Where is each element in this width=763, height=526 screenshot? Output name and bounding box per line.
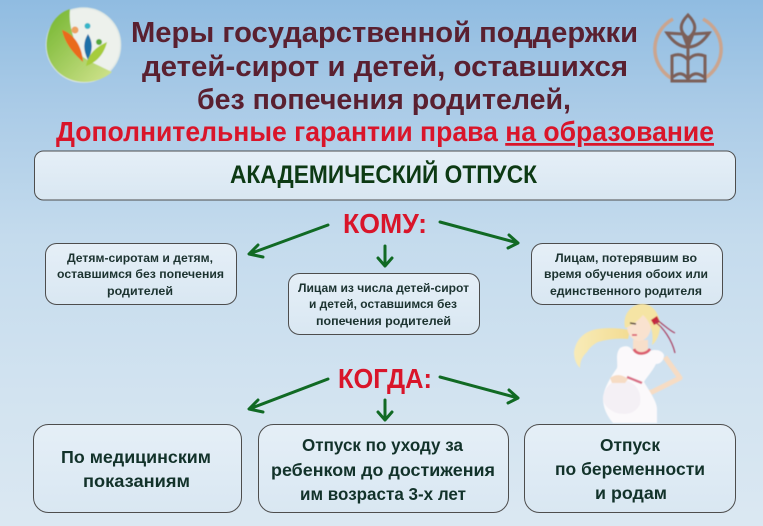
panel: childcare leave: Отпуск по уходу за: [302, 435, 463, 455]
arrow: to whom centre: [378, 246, 392, 266]
title: Дополнительные гарантии права на образование: [56, 116, 714, 147]
panel: persons who lost parents: единственного родителя: [550, 284, 702, 298]
heading: to whom: КОМУ:: [343, 208, 427, 239]
panel: pregnancy and childbirth leave: [524, 424, 736, 512]
panel: persons from among orphans: [288, 274, 480, 334]
icon: right logo with book and sprout: [655, 15, 721, 81]
panel: persons from among orphans: и детей, оставшимся без: [309, 297, 457, 311]
panel: medical grounds: По медицинским: [61, 447, 211, 467]
arrow: when centre: [378, 400, 392, 420]
panel: academic leave heading: [34, 151, 736, 200]
panel: childcare leave: [258, 424, 508, 512]
icon: left logo with leaves and figures: [46, 8, 120, 82]
panel: persons who lost parents: Лицам, потерявшим во: [555, 251, 697, 265]
panel: pregnancy and childbirth leave: и родам: [595, 483, 667, 503]
panel: medical grounds: [34, 424, 242, 512]
panel: pregnancy and childbirth leave: по беременности: [555, 459, 705, 479]
panel: orphans: оставшимся без попечения: [57, 267, 224, 281]
title: Меры государственной поддержки: [131, 17, 638, 49]
title: без попечения родителей,: [197, 84, 571, 116]
icon: pregnant woman illustration: [574, 304, 680, 423]
arrow: when left: [249, 379, 328, 412]
title: детей-сирот и детей, оставшихся: [142, 51, 628, 83]
heading: when: КОГДА:: [338, 363, 432, 394]
title: [56, 17, 714, 147]
arrow: to whom right: [440, 222, 518, 248]
arrow: to whom left: [249, 225, 328, 257]
panel: persons from among orphans: попечения родителей: [316, 314, 451, 328]
panel: pregnancy and childbirth leave: Отпуск: [600, 435, 660, 455]
panel: orphans: Детям-сиротам и детям,: [67, 251, 213, 265]
panel: persons from among orphans: Лицам из числа детей-сирот: [298, 281, 469, 295]
panel: persons who lost parents: [532, 244, 722, 304]
panel: academic leave heading: АКАДЕМИЧЕСКИЙ ОТПУСК: [230, 159, 538, 189]
panel: persons who lost parents: время обучения обоих или: [544, 267, 708, 281]
panel: childcare leave: ребенком до достижения: [271, 460, 495, 480]
panel: orphans: родителей: [107, 284, 173, 298]
panel: orphans: [46, 244, 236, 304]
arrow: when right: [440, 377, 518, 403]
panel: medical grounds: показаниям: [83, 471, 190, 491]
panel: childcare leave: им возраста 3-х лет: [300, 484, 466, 504]
